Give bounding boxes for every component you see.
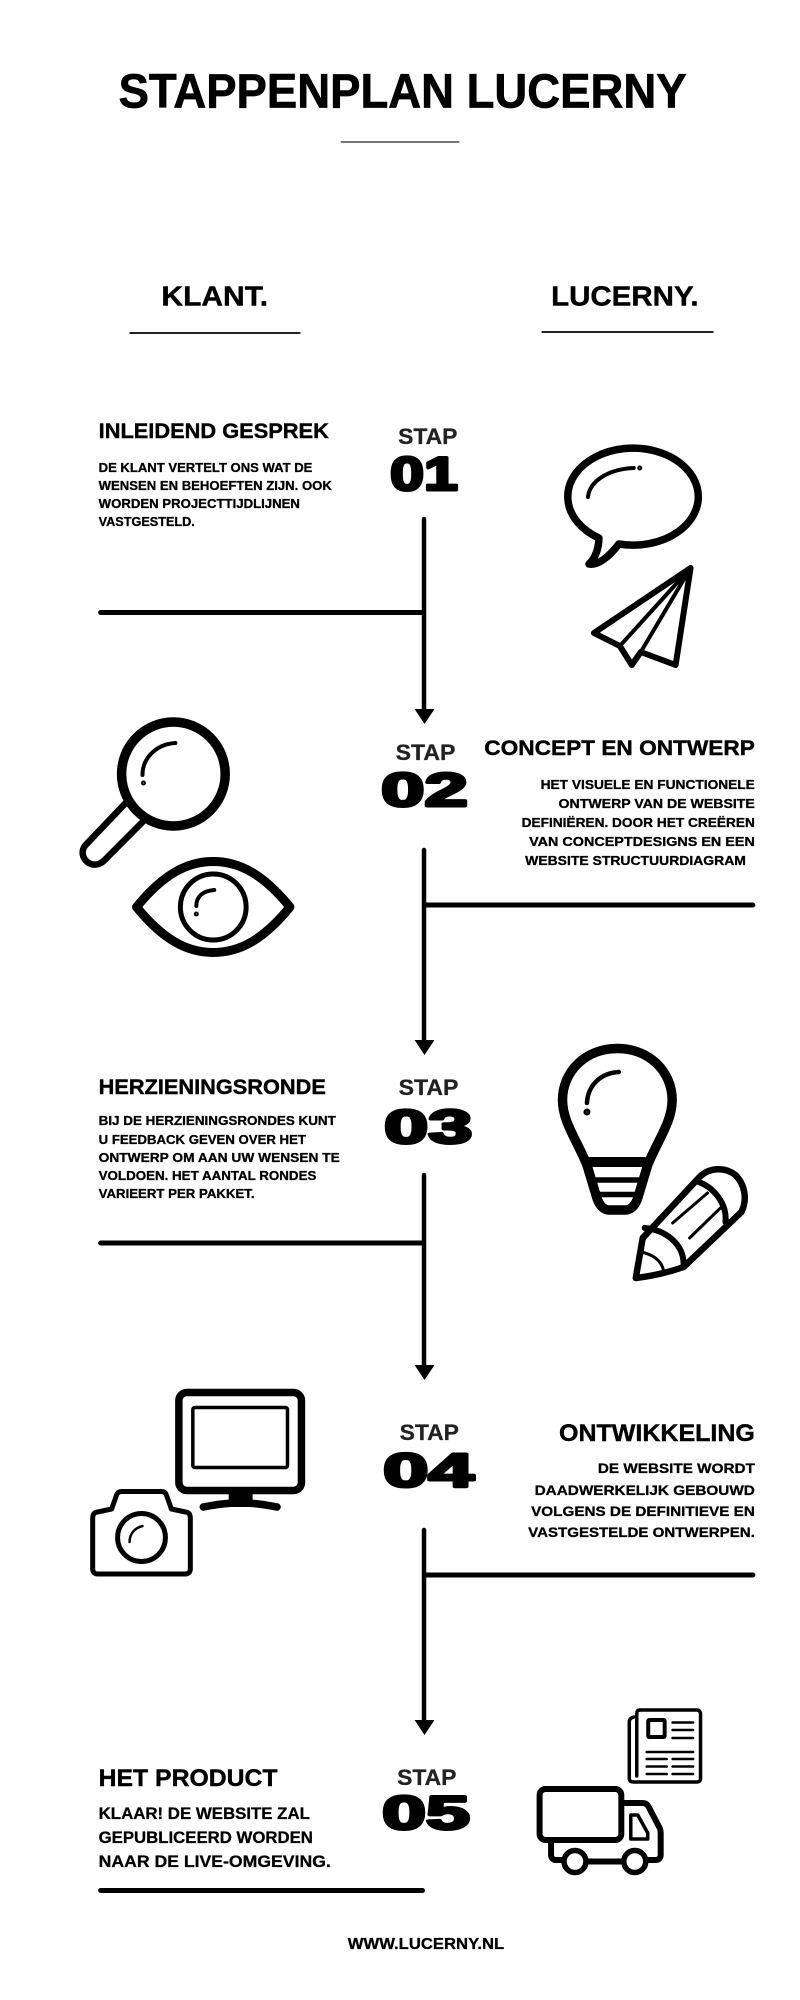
step 5 text: het product: HET PRODUCT [99,1765,278,1792]
step 2 label [381,740,468,816]
step 5 text: het product [99,1765,331,1871]
step 4 text: ontwikkeling: ONTWIKKELING [559,1420,755,1447]
step 4 label [383,1420,474,1497]
step 1 label: 01 [390,448,458,500]
step 1 label: STAP [398,424,457,449]
step 5 label: 05 [382,1787,470,1839]
step 1 label [390,424,458,500]
icon: newspaper [629,1710,701,1782]
step 3 text: herzieningsronde: HERZIENINGSRONDE [99,1075,326,1099]
step 1 text: inleidend gesprek: WORDEN PROJECTTIJDLIJNEN [99,497,300,511]
column heading: lucerny: LUCERNY. [551,280,699,312]
step 3 text: herzieningsronde: VARIEERT PER PAKKET. [99,1187,255,1201]
step 5 label [382,1765,470,1839]
step 2 text: concept en ontwerp [484,736,755,868]
icon: pencil [636,1169,745,1278]
step 4 text: ontwikkeling: DE WEBSITE WORDT [598,1460,755,1476]
step 5 text: het product: KLAAR! DE WEBSITE ZAL [99,1804,310,1823]
step 4 text: ontwikkeling: DAADWERKELIJK GEBOUWD [535,1482,755,1498]
icon: delivery truck [540,1789,661,1872]
arrow: step 1 to step 2 [415,519,434,724]
step 3 text: herzieningsronde: ONTWERP OM AAN UW WENSEN TE [99,1151,340,1165]
step 5 text: het product: GEPUBLICEERD WORDEN [99,1828,313,1847]
step 1 text: inleidend gesprek: WENSEN EN BEHOEFTEN ZIJN. OOK [99,479,332,493]
step 2 text: concept en ontwerp: HET VISUELE EN FUNCTIONELE [541,778,755,792]
step 3 label: 03 [384,1101,472,1153]
step 1 text: inleidend gesprek: VASTGESTELD. [99,515,195,529]
arrow: step 4 to step 5 [415,1530,434,1735]
step 2 text: concept en ontwerp: CONCEPT EN ONTWERP [484,736,755,760]
step 4 text: ontwikkeling: VASTGESTELDE ONTWERPEN. [528,1524,755,1540]
icon: paper plane [594,568,691,665]
step 2 text: concept en ontwerp: DEFINIËREN. DOOR HET CREËREN [522,815,755,830]
icon: computer monitor [179,1392,301,1507]
step 2 label: STAP [396,740,455,765]
step 1 text: inleidend gesprek: DE KLANT VERTELT ONS WAT DE [99,461,312,475]
title: STAPPENPLAN LUCERNY [119,65,687,119]
step 1 text: inleidend gesprek: INLEIDEND GESPREK [99,419,329,443]
step 2 text: concept en ontwerp: ONTWERP VAN DE WEBSITE [559,797,755,811]
footer url: WWW.LUCERNY.NL [348,1936,504,1953]
step 3 label [384,1075,472,1153]
icon: light bulb [563,1048,672,1210]
icon: camera [93,1492,190,1574]
step 2 label: 02 [381,764,468,816]
step 5 text: het product: NAAR DE LIVE-OMGEVING. [99,1852,331,1871]
step 5 label: STAP [397,1765,456,1790]
step 3 text: herzieningsronde: VOLDOEN. HET AANTAL RONDES [99,1169,316,1183]
step 4 label: STAP [400,1420,459,1445]
step 3 text: herzieningsronde [99,1075,340,1201]
column heading: klant: KLANT. [161,280,268,312]
step 3 label: STAP [399,1075,458,1100]
icon: magnifying glass [83,722,225,865]
arrow: step 3 to step 4 [415,1175,434,1380]
step 2 text: concept en ontwerp: VAN CONCEPTDESIGNS EN EEN [529,835,755,849]
step 2 text: concept en ontwerp: WEBSITE STRUCTUURDIAGRAM [525,854,746,868]
step 4 text: ontwikkeling [528,1420,755,1540]
step 3 text: herzieningsronde: U FEEDBACK GEVEN OVER HET [99,1133,306,1147]
icon: eye [137,862,290,952]
step 4 label: 04 [383,1444,474,1497]
step 4 text: ontwikkeling: VOLGENS DE DEFINITIEVE EN [531,1503,755,1519]
icon: speech bubble [568,448,698,564]
arrow: step 2 to step 3 [415,850,434,1055]
step 3 text: herzieningsronde: BIJ DE HERZIENINGSRONDES KUNT [99,1114,336,1128]
step 1 text: inleidend gesprek [99,419,332,529]
